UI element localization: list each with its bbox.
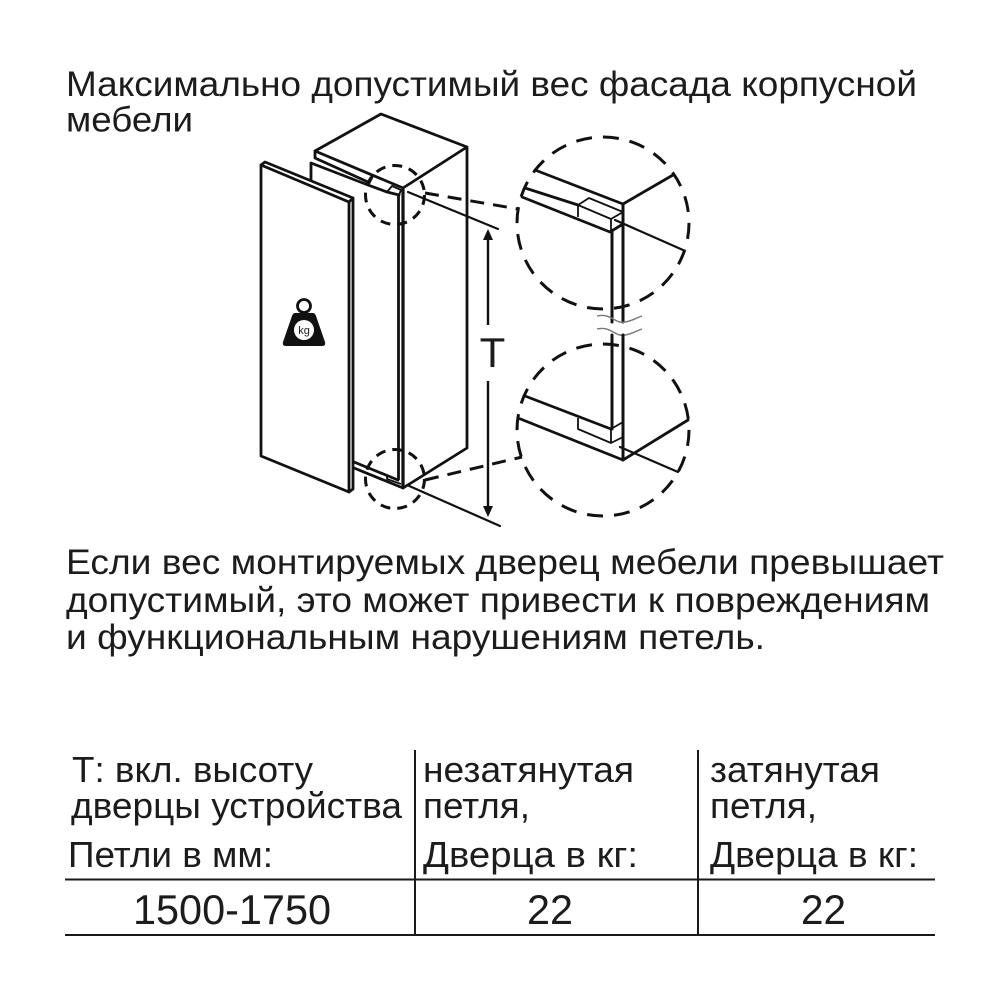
small dashed circle: bottom hinge — [366, 450, 424, 508]
column header: height: дверцы устройства — [71, 785, 403, 826]
value: loose hinge weight: 22 — [527, 886, 573, 933]
value: tightened hinge weight: 22 — [801, 886, 846, 933]
small dashed circle: top hinge — [366, 166, 424, 224]
title — [66, 64, 917, 140]
detail top hinge — [517, 137, 689, 322]
table — [65, 749, 935, 935]
body text — [66, 543, 944, 657]
detail bottom hinge — [517, 335, 689, 516]
column header: tightened hinge — [710, 749, 918, 875]
column header: height: Т: вкл. высоту — [72, 749, 313, 790]
break marks — [597, 315, 642, 335]
cabinet body — [311, 114, 467, 488]
body text: и функциональным нарушениям петель. — [66, 618, 765, 657]
column header: loose hinge: Дверца в кг: — [423, 834, 638, 875]
detail: hinges enlarged — [517, 137, 689, 516]
value: height range: 1500-1750 — [133, 886, 331, 933]
column header: height: Петли в мм: — [68, 834, 273, 875]
column header: loose hinge: незатянутая — [423, 749, 634, 790]
icon: kg weight: kg — [298, 325, 310, 337]
diagram: cabinet and door — [261, 114, 522, 526]
body text: Если вес монтируемых дверец мебели превышает — [66, 543, 944, 582]
door panel — [261, 162, 353, 492]
column header: loose hinge: петля, — [423, 785, 530, 826]
title: мебели — [66, 100, 193, 140]
table rules — [65, 750, 935, 935]
title: Максимально допустимый вес фасада корпусной — [66, 64, 917, 104]
dimension arrow T — [480, 229, 505, 517]
column header: tightened hinge: Дверца в кг: — [710, 834, 918, 875]
body text: допустимый, это может привести к повреждениям — [66, 581, 930, 620]
dimension arrow T: T — [480, 329, 505, 376]
icon: kg weight — [283, 300, 325, 346]
column header: loose hinge — [423, 749, 638, 875]
column header: tightened hinge: петля, — [710, 785, 817, 826]
column header: height — [68, 749, 403, 875]
leader lines — [407, 192, 522, 526]
column header: tightened hinge: затянутая — [710, 749, 880, 790]
